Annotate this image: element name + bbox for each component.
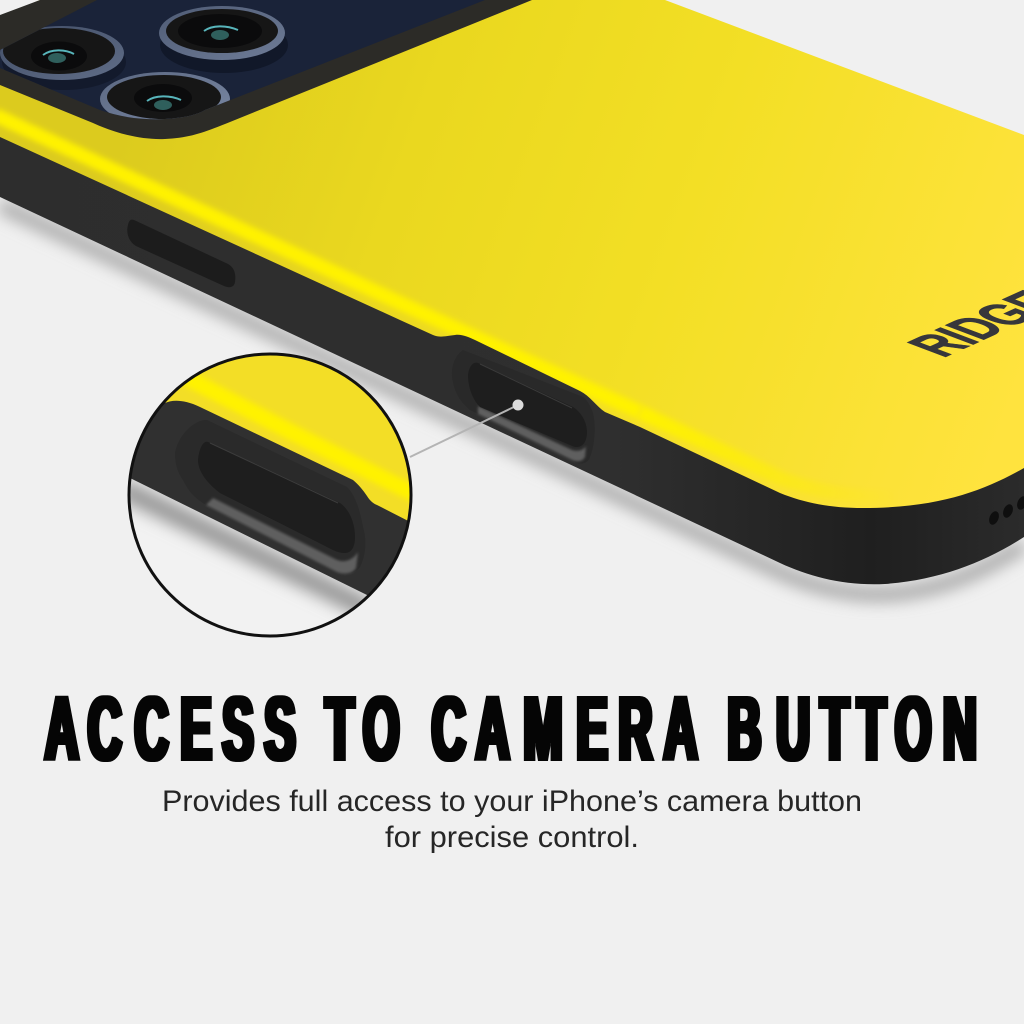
- callout leader line: [410, 400, 524, 457]
- phone case: [0, 0, 1024, 594]
- inset yellow: [165, 356, 410, 520]
- title: ACCESS TO CAMERA BUTTON: [45, 679, 977, 780]
- zoom inset circle: [128, 352, 412, 638]
- cutout recess: [452, 350, 595, 464]
- lens top: [159, 6, 288, 73]
- volume button: [127, 220, 235, 287]
- subtitle line 2: for precise control.: [385, 821, 639, 854]
- inset shadow: [120, 488, 370, 610]
- speaker holes: [989, 496, 1024, 525]
- lens left: [0, 26, 126, 90]
- inset recess: [175, 420, 365, 574]
- inset button pad: [198, 442, 355, 553]
- lenses: [0, 6, 288, 126]
- subtitle line 1: Provides full access to your iPhone’s camera button: [162, 785, 862, 818]
- lens bottom: [100, 72, 230, 120]
- inset ring: [129, 354, 411, 636]
- case drop shadow: [0, 205, 1024, 594]
- camera island: [0, 0, 532, 139]
- subtitle: [162, 785, 862, 854]
- recess lower highlight: [478, 406, 586, 461]
- yellow edge highlight right: [640, 412, 900, 497]
- yellow back panel: [0, 0, 1024, 540]
- island frame: [0, 0, 532, 139]
- inset button light line: [210, 443, 338, 503]
- inset yellow band: [182, 374, 410, 502]
- button pad: [468, 363, 587, 447]
- inset black bumper: [132, 400, 408, 595]
- button top light line: [480, 364, 572, 408]
- yellow edge highlight left: [0, 115, 640, 412]
- island navy plate: [0, 0, 485, 119]
- camera button cutout: [468, 362, 587, 462]
- black side bumper: [0, 137, 1024, 584]
- inset recess highlight: [206, 498, 358, 574]
